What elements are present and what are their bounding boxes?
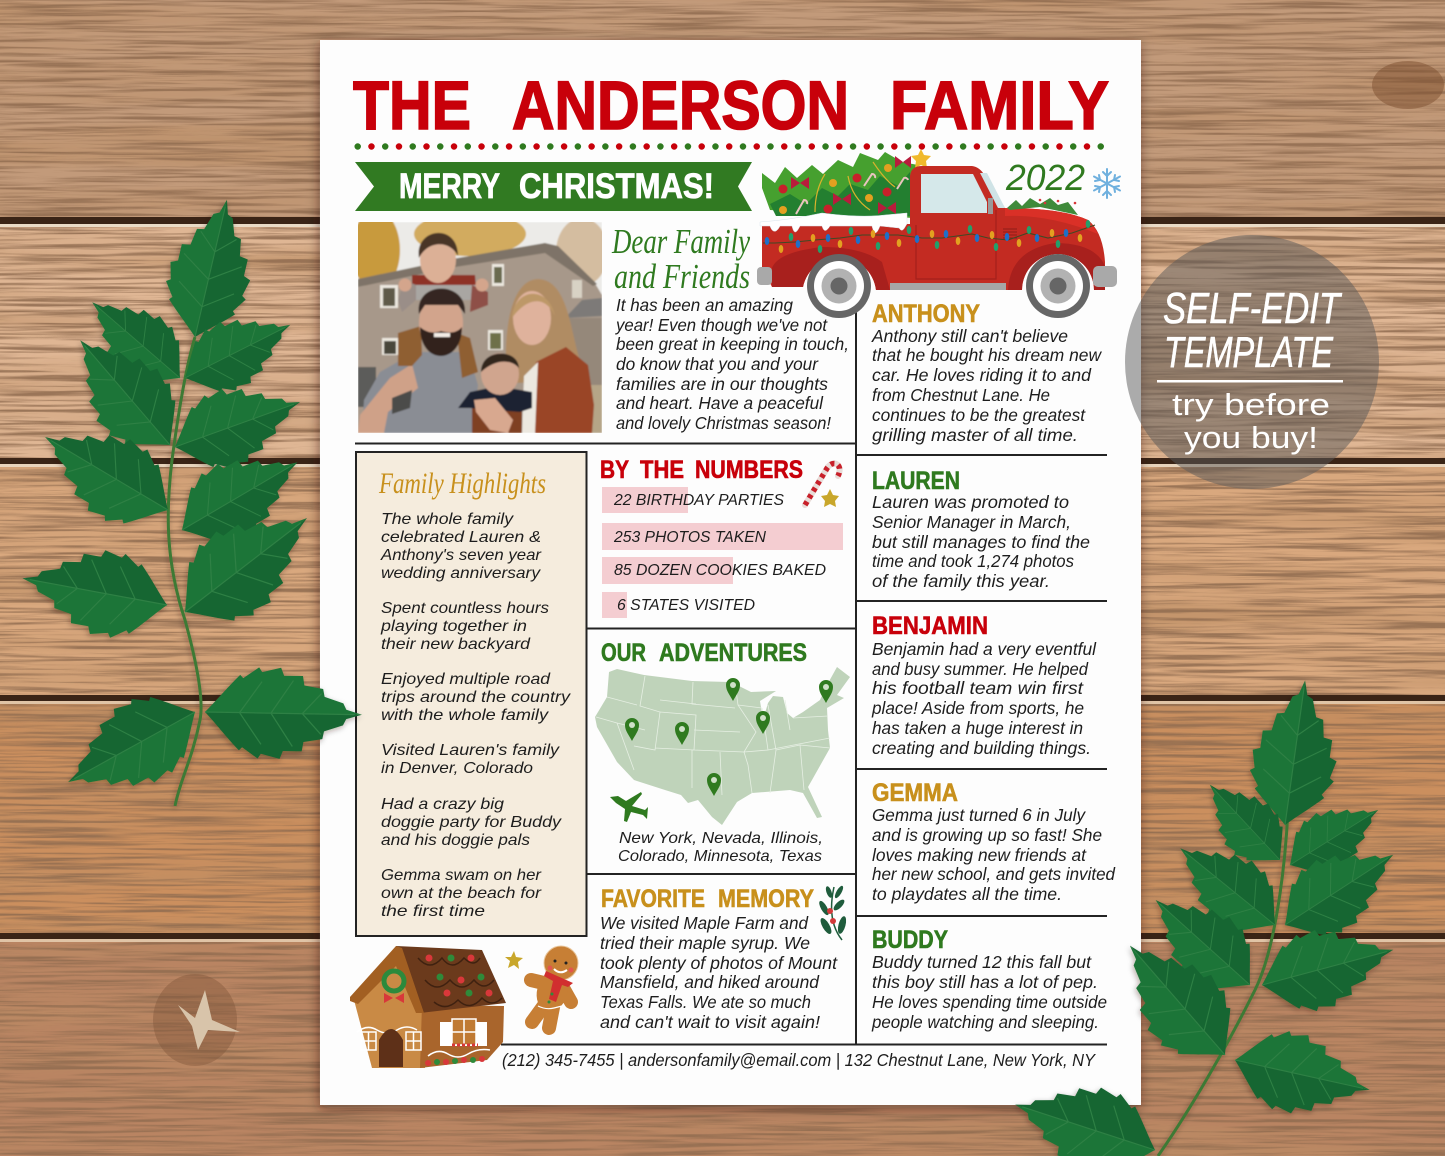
intro letter text: do know that you and your	[616, 354, 819, 374]
section: Buddy: Buddy turned 12 this fall but	[872, 952, 1092, 972]
intro letter text: families are in our thoughts	[616, 374, 828, 394]
favorite memory text: tried their maple syrup. We	[600, 933, 810, 953]
favorite memory text	[600, 913, 838, 1032]
heading: favorite memory: MEMORY	[718, 885, 814, 913]
heading: our adventures	[601, 639, 807, 667]
woman	[506, 279, 580, 383]
heading: by the numbers: BY	[600, 456, 629, 484]
truck body	[762, 166, 1105, 290]
bar chart: by the numbers: 22 BIRTHDAY PARTIES	[613, 492, 784, 509]
section: Lauren: LAUREN	[872, 467, 960, 495]
illustration: gingerbread man	[531, 946, 578, 1028]
favorite memory text: took plenty of photos of Mount	[600, 953, 838, 973]
icon: snowflake	[1094, 169, 1120, 198]
column and section rules	[355, 300, 1107, 1044]
section: Lauren: but still manages to find the	[872, 532, 1090, 552]
badge: self-edit template: you buy!	[1184, 420, 1318, 455]
title: ANDERSON	[512, 67, 849, 144]
highlights list: wedding anniversary	[381, 565, 541, 582]
favorite memory text: We visited Maple Farm and	[600, 913, 809, 933]
heading: favorite memory: FAVORITE	[601, 885, 705, 913]
intro letter text: been great in keeping in touch,	[616, 334, 849, 354]
heading: by the numbers: NUMBERS	[695, 456, 803, 484]
section: Buddy	[871, 926, 1107, 1032]
section: Gemma: her new school, and gets invited	[872, 864, 1116, 884]
section: Gemma	[872, 779, 1116, 904]
badge: self-edit template: TEMPLATE	[1164, 328, 1333, 377]
hood garland	[1007, 198, 1078, 215]
section: Benjamin	[871, 612, 1097, 758]
highlights list: and his doggie pals	[381, 832, 530, 849]
section: Anthony: continues to be the greatest	[872, 405, 1086, 425]
adventures caption	[618, 830, 823, 865]
section: Buddy: BUDDY	[872, 926, 948, 954]
year 2022: 2022	[1005, 157, 1085, 198]
rear wheel	[807, 254, 871, 318]
section: Benjamin: his football team win first	[872, 678, 1084, 698]
heading: by the numbers: THE	[640, 456, 684, 484]
man	[362, 352, 478, 433]
highlights list: playing together in	[380, 618, 527, 635]
section: Gemma: to playdates all the time.	[872, 884, 1062, 904]
family photo	[352, 210, 608, 433]
icon: airplane	[610, 792, 648, 822]
heading: Dear Family and Friends: Dear Family	[611, 222, 750, 261]
map pins	[625, 678, 833, 796]
adventures caption: New York, Nevada, Illinois,	[619, 830, 823, 847]
section: Lauren: Lauren was promoted to	[872, 492, 1069, 512]
heading: favorite memory	[601, 885, 814, 913]
section: Buddy: He loves spending time outside	[872, 992, 1107, 1012]
section: Gemma: Gemma just turned 6 in July	[872, 805, 1086, 825]
panel: family highlights	[356, 452, 586, 936]
section: Buddy: people watching and sleeping.	[871, 1012, 1099, 1032]
cab window	[921, 174, 987, 213]
intro letter text: and lovely Christmas season!	[616, 413, 831, 433]
highlights list: Spent countless hours	[381, 600, 549, 617]
adventures caption: Colorado, Minnesota, Texas	[618, 848, 822, 865]
bar chart: by the numbers	[602, 487, 843, 618]
tree on truck bed	[762, 149, 931, 218]
section: Anthony: grilling master of all time.	[872, 425, 1078, 445]
favorite memory text: Mansfield, and hiked around	[600, 972, 820, 992]
contact footer: (212) 345-7455 | andersonfamily@email.com | 132 Chestnut Lane, New York, NY	[502, 1050, 1096, 1070]
illustration: red truck with Christmas tree	[757, 149, 1117, 318]
bumpers and running board	[757, 267, 772, 285]
highlights list	[380, 511, 571, 920]
highlights list: The whole family	[381, 511, 514, 528]
heading: by the numbers	[600, 456, 803, 484]
section: Benjamin: BENJAMIN	[872, 612, 988, 640]
favorite memory text: and can't wait to visit again!	[600, 1012, 820, 1032]
section: Gemma: GEMMA	[872, 779, 958, 807]
heading: our adventures: ADVENTURES	[659, 639, 807, 667]
title	[353, 67, 1109, 144]
highlights list: Had a crazy big	[381, 796, 504, 813]
intro letter text	[615, 295, 849, 433]
badge: self-edit template	[1125, 235, 1379, 489]
intro letter text: It has been an amazing	[616, 295, 793, 315]
baby	[471, 407, 522, 433]
right leafy branch	[1002, 675, 1414, 1156]
highlights list: their new backyard	[381, 636, 531, 653]
icon: gold star	[821, 489, 839, 507]
illustration: gingerbread house	[350, 946, 506, 1068]
banner: Merry Christmas	[355, 162, 752, 211]
highlights list: with the whole family	[381, 707, 549, 724]
section: Benjamin: has taken a huge interest in	[872, 718, 1083, 738]
heading: Dear Family and Friends: and Friends	[614, 257, 750, 296]
badge: self-edit template: try before	[1172, 387, 1330, 422]
intro letter text: and heart. Have a peaceful	[616, 393, 824, 413]
section: Benjamin: place! Aside from sports, he	[871, 698, 1084, 718]
section: Lauren	[872, 467, 1090, 591]
paper sheet	[320, 40, 1141, 1105]
heading: our adventures: OUR	[601, 639, 646, 667]
section: Anthony: Anthony still can't believe	[871, 326, 1068, 346]
section: Lauren: time and took 1,274 photos	[872, 551, 1074, 571]
map of the United States	[595, 667, 850, 825]
section: Lauren: Senior Manager in March,	[872, 512, 1071, 532]
section: Buddy: this boy still has a lot of pep.	[872, 972, 1098, 992]
section: Benjamin: creating and building things.	[872, 738, 1091, 758]
string lights	[763, 225, 1095, 243]
title: FAMILY	[890, 67, 1109, 144]
bar chart: by the numbers: 253 PHOTOS TAKEN	[613, 529, 766, 546]
section: Gemma: and is growing up so fast! She	[872, 825, 1102, 845]
section: Benjamin: and busy summer. He helped	[872, 659, 1089, 679]
snow on bed	[760, 213, 907, 233]
section: Anthony: car. He loves riding it to and	[872, 365, 1092, 385]
highlights list: Enjoyed multiple road	[381, 671, 551, 688]
intro letter text: year! Even though we've not	[615, 315, 828, 335]
highlights list: doggie party for Buddy	[381, 814, 562, 831]
section: Anthony	[871, 300, 1102, 445]
highlights list: trips around the country	[381, 689, 571, 706]
dotted divider	[358, 143, 1101, 150]
favorite memory text: Texas Falls. We ate so much	[600, 992, 811, 1012]
section: Anthony: ANTHONY	[872, 300, 980, 328]
banner: Merry Christmas: MERRY	[399, 167, 500, 206]
highlights list: Anthony's seven year	[380, 547, 542, 564]
highlights list: celebrated Lauren &	[381, 529, 541, 546]
child	[416, 280, 476, 300]
section: Lauren: of the family this year.	[872, 571, 1050, 591]
icon: holly sprig	[817, 885, 848, 940]
icon: small gold star	[505, 951, 523, 969]
highlights list: own at the beach for	[381, 885, 542, 902]
highlights list: Visited Lauren's family	[381, 742, 560, 759]
bar chart: by the numbers: 85 DOZEN COOKIES BAKED	[614, 562, 826, 579]
front wheel	[1026, 254, 1090, 318]
icon: candy cane	[805, 463, 840, 505]
heading: Family Highlights: Family Highlights	[378, 467, 546, 500]
bar chart: by the numbers: 6 STATES VISITED	[617, 597, 755, 614]
section: Gemma: loves making new friends at	[872, 845, 1087, 865]
highlights list: the first time	[381, 903, 485, 920]
section: Benjamin: Benjamin had a very eventful	[872, 639, 1097, 659]
section: Anthony: from Chestnut Lane. He	[872, 385, 1050, 405]
badge: self-edit template: SELF-EDIT	[1163, 284, 1342, 333]
banner: Merry Christmas: CHRISTMAS!	[519, 167, 714, 206]
highlights list: Gemma swam on her	[381, 867, 542, 884]
section: Anthony: that he bought his dream new	[872, 345, 1102, 365]
left leafy branch	[15, 190, 363, 819]
heading: Dear Family and Friends	[611, 222, 750, 296]
title: THE	[353, 67, 471, 144]
highlights list: in Denver, Colorado	[381, 760, 533, 777]
